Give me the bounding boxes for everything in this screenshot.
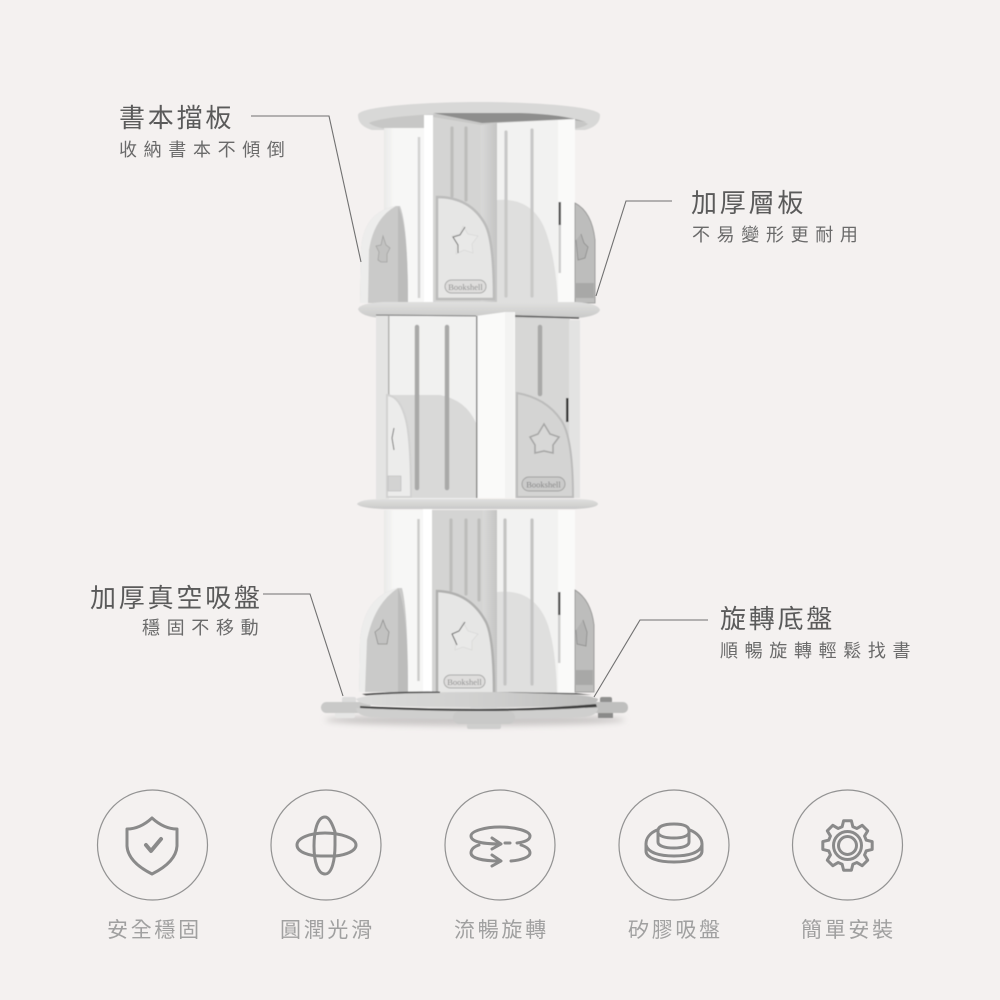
lower plate	[356, 708, 598, 719]
description: 收納書本不傾倒	[119, 140, 292, 160]
feature: easy install	[792, 790, 902, 942]
front book stopper	[437, 591, 494, 695]
middle tier	[376, 312, 580, 499]
heading: 加厚層板	[691, 188, 806, 218]
left book stopper	[360, 206, 408, 303]
star icon	[375, 620, 389, 644]
right book stopper	[575, 590, 594, 692]
leader line	[251, 116, 361, 262]
feature: smooth round	[271, 790, 381, 942]
description: 順暢旋轉輕鬆找書	[720, 640, 917, 661]
label: 矽膠吸盤	[628, 919, 723, 942]
feature: smooth rotation	[445, 790, 555, 942]
description: 穩固不移動	[142, 618, 265, 638]
Bookshell label: Bookshell	[526, 480, 561, 490]
icon: orbit	[297, 817, 356, 874]
suction feet	[342, 697, 356, 703]
circle	[619, 790, 729, 900]
label: 安全穩固	[107, 919, 202, 942]
circle	[792, 790, 902, 900]
heading: 旋轉底盤	[720, 604, 835, 634]
callout: suction cup	[90, 583, 343, 696]
leader line	[594, 620, 708, 697]
icon: gear	[823, 821, 872, 870]
icon: suction disc	[646, 824, 702, 862]
circle	[445, 790, 555, 900]
left book stopper	[359, 588, 408, 692]
callout: book stopper	[119, 103, 361, 262]
label: 圓潤光滑	[280, 919, 375, 942]
top tier	[358, 102, 600, 303]
left ear	[321, 702, 371, 713]
right book stopper	[575, 203, 595, 303]
top disc	[358, 102, 600, 130]
circle	[271, 790, 381, 900]
icon: shield	[127, 818, 177, 874]
heading: 加厚真空吸盤	[90, 583, 263, 613]
label	[388, 476, 401, 491]
description: 不易變形更耐用	[692, 225, 865, 245]
star icon	[452, 226, 478, 254]
star icon	[452, 622, 478, 650]
heading: 書本擋板	[119, 103, 234, 133]
leader line	[263, 594, 343, 696]
leader line	[596, 201, 672, 296]
Bookshell label	[444, 675, 485, 688]
center ear	[453, 711, 515, 724]
label: 流暢旋轉	[454, 919, 549, 942]
shelf board 3	[357, 499, 598, 509]
front-left book stopper	[387, 395, 411, 497]
Bookshell label: Bookshell	[447, 677, 482, 687]
base shadow	[325, 714, 625, 726]
Bookshell label	[522, 477, 565, 491]
shelf board 2	[358, 302, 600, 318]
bottom tier	[359, 509, 594, 695]
right ear	[585, 702, 628, 713]
Bookshell label	[445, 280, 486, 293]
feature: silicone suction	[619, 790, 729, 942]
Bookshell label: Bookshell	[448, 282, 483, 292]
label: 簡單安裝	[801, 919, 896, 942]
bookshelf product illustration	[321, 102, 628, 729]
front-right book stopper	[517, 393, 573, 497]
callout: thick shelf	[596, 188, 865, 296]
rotating base	[321, 691, 628, 729]
icon: rotating discs	[471, 827, 530, 866]
feature: safe and stable	[98, 790, 208, 942]
front book stopper	[437, 197, 494, 299]
star icon	[530, 424, 559, 453]
callout: rotating base	[594, 604, 917, 697]
circle	[98, 790, 208, 900]
upper turntable	[356, 692, 598, 708]
star icon	[376, 236, 390, 262]
